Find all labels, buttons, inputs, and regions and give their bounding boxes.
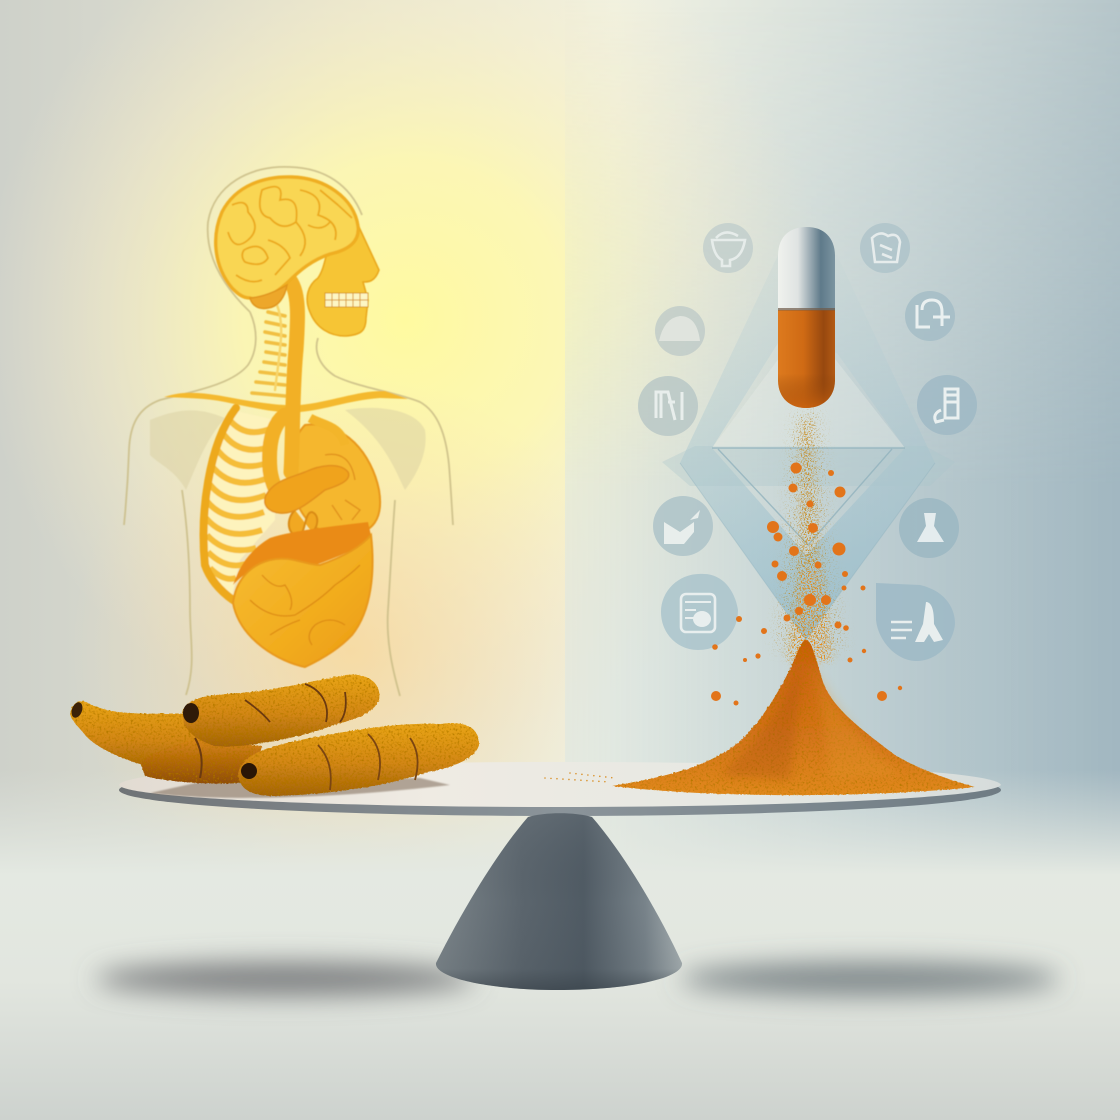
middle low root xyxy=(141,738,262,784)
top root xyxy=(183,675,379,746)
falling powder stream xyxy=(711,412,902,706)
icon: anatomy badge xyxy=(876,583,955,661)
skull and jaw xyxy=(307,225,379,336)
ring of pictogram icons xyxy=(638,223,977,661)
heart and lungs xyxy=(291,425,380,536)
icon: organ cluster xyxy=(860,223,910,273)
icon: columns xyxy=(638,376,698,436)
translucent geometric diamond frame xyxy=(662,255,955,640)
aortic arch xyxy=(270,415,285,505)
clavicles xyxy=(164,391,408,412)
droplets xyxy=(711,462,902,706)
brain xyxy=(216,177,358,299)
balance table xyxy=(119,762,1001,816)
lower organ xyxy=(233,535,373,667)
icon: machine badge xyxy=(661,574,738,650)
powder pile xyxy=(545,640,975,795)
icon: flask xyxy=(899,498,959,558)
small intestine loops xyxy=(289,510,317,536)
cerebellum xyxy=(250,285,287,308)
orange wedge liver xyxy=(233,522,372,585)
back left root xyxy=(70,701,205,772)
teeth xyxy=(325,293,368,307)
icon: device xyxy=(905,291,955,341)
body outline xyxy=(124,167,453,696)
floor shadows beneath the balance xyxy=(95,962,1060,996)
turmeric roots xyxy=(70,675,479,798)
neck vertebrae xyxy=(252,305,285,396)
icon: cell texture xyxy=(655,306,705,356)
stomach tube xyxy=(265,466,349,513)
icon: mortar xyxy=(653,496,713,556)
translucent human body with organs xyxy=(124,167,453,696)
ribcage xyxy=(204,408,275,600)
spinal cord xyxy=(288,278,298,472)
capsule xyxy=(778,227,835,408)
fine speckled powder column xyxy=(776,412,844,650)
shoulder shading xyxy=(150,410,225,490)
icon: test tube xyxy=(917,375,977,435)
front root xyxy=(238,723,479,796)
icon: bowl xyxy=(703,223,753,273)
pedestal cone xyxy=(436,813,682,990)
